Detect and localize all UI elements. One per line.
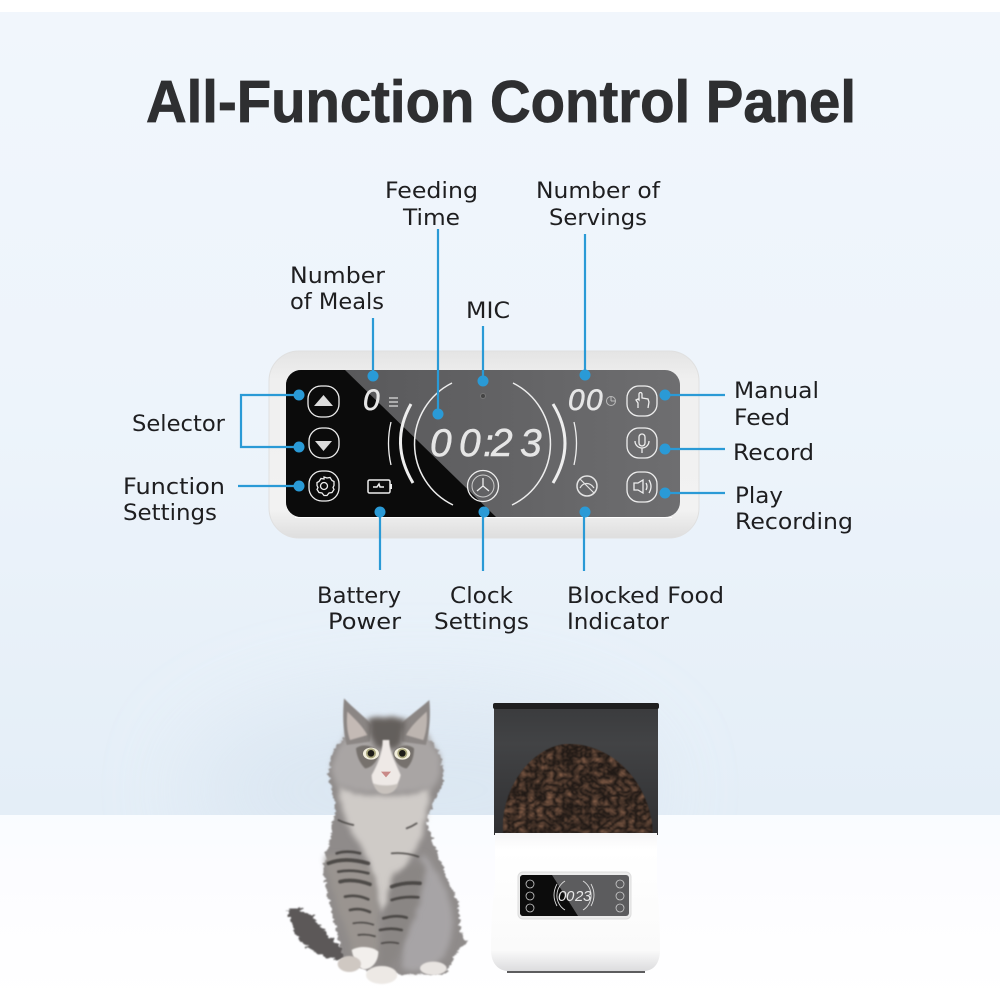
callout: record: Record [733, 440, 814, 466]
control panel device [269, 351, 699, 538]
callout: MIC [466, 298, 510, 386]
callout: clock settings: Settings [434, 609, 529, 635]
icon: meals list [389, 398, 398, 406]
mini panel digits: 0023 [558, 888, 592, 905]
feeder lid [493, 703, 659, 709]
feeder foot [507, 971, 645, 973]
callout: number of meals: Number [290, 263, 386, 289]
feeder base [491, 833, 660, 971]
cat tail [287, 909, 350, 960]
callout: blocked food indicator: Indicator [567, 609, 670, 635]
callout: play recording: Play [735, 483, 783, 509]
callout: clock settings [434, 506, 529, 635]
cat white paws [338, 947, 447, 984]
callout: selector [132, 390, 304, 452]
callout: manual feed [660, 378, 819, 431]
feeder mini panel [518, 872, 631, 919]
cat face [356, 740, 414, 794]
icon: clock button [468, 470, 498, 502]
callout: play recording [660, 483, 853, 535]
cat ears [343, 698, 430, 745]
icon: up button [308, 386, 339, 417]
callout: battery power: Power [328, 609, 402, 635]
icon: blocked food [577, 476, 597, 496]
cat head fur [332, 717, 440, 793]
callout: feeding time [385, 178, 478, 420]
display: servings digits: 00 [568, 384, 603, 417]
callout: number of servings: Number of [536, 178, 661, 204]
callout: MIC: MIC [466, 298, 510, 324]
cat right haunch [402, 853, 453, 971]
icon: settings gear [309, 471, 339, 501]
callout: manual feed: Manual [734, 378, 819, 404]
cat eyes [363, 748, 410, 760]
icon: mic hole [480, 394, 486, 398]
cat ruff and chest [338, 783, 430, 910]
callout: blocked food indicator: Blocked Food [567, 583, 724, 609]
callout: battery power: Battery [317, 583, 401, 609]
display: dial arcs [388, 383, 576, 505]
cat right foreleg [378, 862, 425, 970]
cat nose [381, 772, 391, 777]
icon: manual feed button [627, 386, 657, 416]
callout: function settings [123, 474, 304, 526]
callout: number of meals [290, 263, 386, 382]
cat fur stripes [328, 820, 420, 943]
callout: number of servings: Servings [549, 205, 647, 231]
feeder tank [494, 705, 658, 835]
feeder kibble [503, 744, 653, 833]
icon: servings timer [606, 396, 616, 406]
icon: battery [368, 480, 392, 493]
callout: blocked food indicator [567, 506, 724, 635]
display: meals digit: 0 [363, 384, 380, 417]
callout: play recording: Recording [735, 509, 853, 535]
callout: clock settings: Clock [450, 583, 513, 609]
panel: glass face [286, 370, 680, 518]
icon: record button [627, 428, 657, 458]
callout: selector: Selector [132, 411, 226, 437]
illustration: cat [287, 698, 467, 984]
callout: manual feed: Feed [734, 405, 790, 431]
callout: number of meals: of Meals [290, 289, 384, 315]
callout: record [660, 440, 814, 466]
panel: white bezel [269, 351, 699, 538]
callout: battery power [317, 506, 402, 635]
icon: play recording button [627, 472, 657, 502]
cat forehead [368, 718, 405, 748]
cat silhouette [324, 737, 467, 975]
callout: number of servings [536, 178, 661, 380]
callout: feeding time: Feeding [385, 178, 478, 204]
callout: function settings: Settings [123, 500, 217, 526]
cat left foreleg [325, 855, 379, 957]
display: clock digits: 00:23 [430, 422, 542, 465]
icon: down button [309, 428, 339, 458]
title: All-Function Control Panel [146, 69, 856, 135]
illustration: feeder [491, 703, 660, 972]
callout: function settings: Function [123, 474, 225, 500]
callout: feeding time: Time [402, 205, 460, 231]
